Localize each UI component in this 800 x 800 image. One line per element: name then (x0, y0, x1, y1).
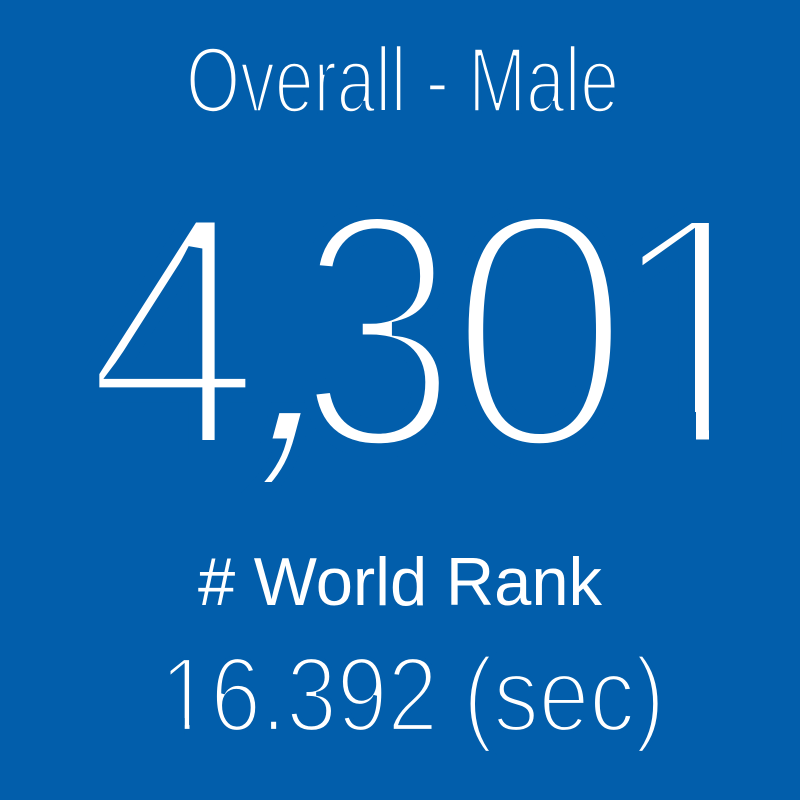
heading: Overall - Male: Overall - Male (186, 28, 619, 132)
label: # World Rank: # World Rank (198, 544, 603, 620)
main number: 4,301: , (215, 137, 411, 517)
main number: 4,301: 0 (448, 142, 631, 520)
main number: 4,301 (85, 137, 790, 520)
main number: 4,301: 1 (602, 142, 790, 520)
main number: 4,301: 3 (298, 143, 458, 520)
value: 16.392 (sec): 16.392 (sec) (160, 636, 665, 754)
main number: 4,301: 4 (85, 141, 262, 520)
